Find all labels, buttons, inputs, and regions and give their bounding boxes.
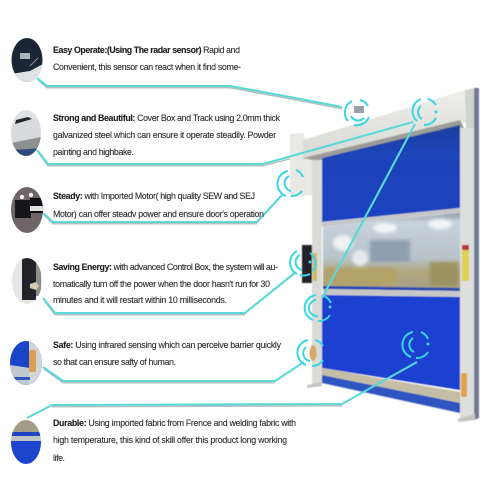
thumbnail: motor (11, 187, 43, 233)
text block: durable: high temperature, this kind of skill offer this product long working (53, 435, 287, 445)
right post dark edge (474, 88, 479, 420)
warning label (462, 246, 469, 281)
hotspot: door curtain (305, 295, 332, 321)
hotspot: radar sensor (345, 100, 369, 125)
text block: saving energy: minutes and it will restart within 10 milliseconds. (53, 295, 227, 305)
text block: durable: Durable: Using imported fabric from Frence and welding fabric with (53, 418, 296, 428)
right end plate (465, 88, 476, 135)
left post (312, 160, 322, 386)
control box label (313, 253, 317, 281)
left foot plate (307, 382, 322, 388)
connector: easy operate (37, 78, 342, 109)
text block: easy operate: Convenient, this sensor can react when it find some- (53, 62, 241, 72)
connector: radial door line (322, 124, 415, 298)
window bottom edge (323, 286, 460, 291)
text block: safe: so that can ensure safty of human. (53, 357, 176, 367)
text block: strong and beautiful: painting and highbake. (53, 147, 134, 157)
thumbnail: control box (12, 258, 42, 304)
text block: safe: Safe: Using infrared sensing which can perceive barrier quickly (53, 340, 282, 350)
hotspot: cover box (413, 99, 438, 125)
connector: saving energy (43, 272, 296, 315)
upper rail (322, 208, 460, 227)
roller door illustration (290, 88, 479, 422)
lower blue curtain panel (322, 295, 460, 390)
connector: safe (43, 362, 304, 383)
right post (460, 128, 474, 419)
text block: steady: Steady: with Imported Motor( high quality SEW and SEJ (53, 191, 255, 201)
control box (302, 245, 312, 283)
hotspot: motor (277, 170, 303, 196)
bottom blue strip (322, 375, 460, 413)
text block: easy operate (53, 45, 241, 72)
connector: durable (27, 362, 417, 418)
lower rail (323, 289, 460, 297)
hotspot: control box (290, 251, 315, 276)
hotspot: infrared sensor (297, 340, 323, 366)
connector: strong and beautiful (37, 122, 413, 166)
header underside (303, 120, 466, 167)
text block: durable: life. (53, 453, 65, 463)
right sensor (461, 373, 467, 397)
text block: easy operate: Easy Operate:(Using The radar sensor) Rapid and (53, 45, 240, 55)
text block: durable (53, 418, 296, 463)
red sign (462, 245, 469, 250)
text block: saving energy: tomatically turn off the power when the door hasn't run for 30 (53, 279, 270, 289)
text block: saving energy (53, 262, 278, 305)
thumbnail: fabric (11, 420, 41, 464)
text block: steady (53, 191, 264, 219)
thumbnail: infrared sensor (10, 341, 42, 385)
text block: strong and beautiful (53, 113, 281, 157)
left wheel sensor (310, 345, 316, 361)
door header cover box (303, 88, 479, 160)
window reflections (326, 219, 458, 286)
thumbnail: cover box (11, 110, 41, 156)
text block: strong and beautiful: Strong and Beautiful: Cover Box and Track using 2.0mm thick (53, 113, 281, 123)
right foot plate (457, 414, 475, 422)
text block: safe (53, 340, 282, 367)
text block: saving energy: Saving Energy: with advanced Control Box, the system will au- (53, 262, 278, 272)
connector: steady (43, 195, 282, 224)
thumbnail: radar sensor (11, 38, 43, 82)
bottom beam (322, 368, 460, 403)
text block: strong and beautiful: galvanized steel which can ensure it operate steadily. Powder (53, 130, 276, 140)
text block: steady: Motor) can offer steadv power and ensure door's operation (53, 209, 264, 219)
side drive box (290, 133, 312, 197)
vision window (323, 213, 460, 288)
hotspot: fabric (402, 332, 430, 358)
upper blue curtain panel (322, 125, 460, 222)
